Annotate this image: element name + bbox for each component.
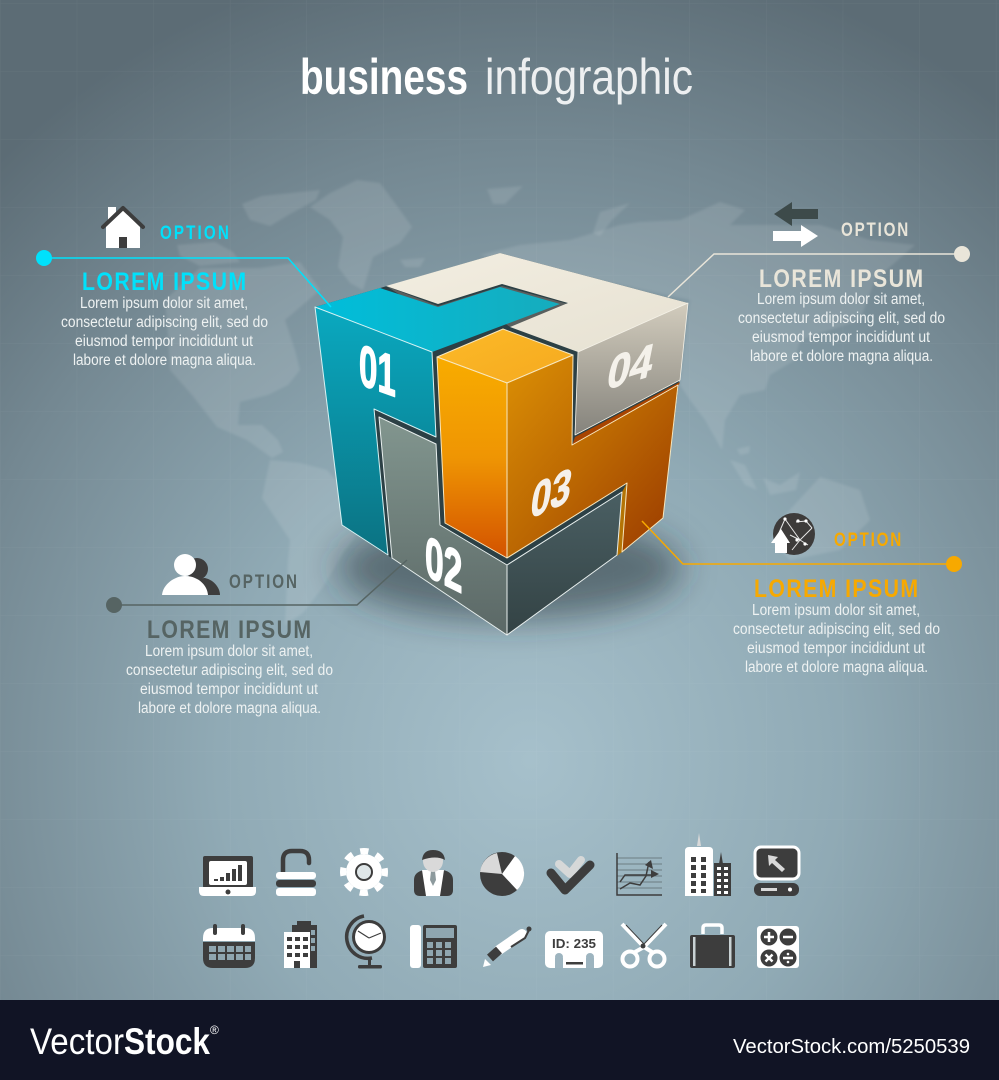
text block: Lorem ipsum dolor sit amet, [80, 295, 248, 312]
cube piece 03 [437, 329, 678, 558]
icon: exchange arrows [773, 202, 818, 247]
text block: labore et dolore magna aliqua. [138, 700, 321, 717]
text block [126, 643, 333, 717]
text block: eiusmod tempor incididunt ut [75, 333, 254, 350]
icon: office building [284, 921, 317, 968]
text block [61, 295, 268, 369]
text block: labore et dolore magna aliqua. [73, 352, 256, 369]
leader line: option 2 [106, 560, 407, 613]
watermark id: VectorStock.com/5250539 [733, 1036, 970, 1058]
icon row 2 [203, 916, 799, 968]
text block: consectetur adipiscing elit, sed do [126, 662, 333, 679]
icon: calendar [203, 924, 255, 968]
icon: briefcase [690, 925, 735, 968]
panel: option 4 [738, 202, 945, 365]
cube piece 01: 01 [359, 333, 396, 410]
cube piece 03: 03 [527, 456, 575, 530]
icon: pie chart [480, 852, 524, 896]
icon: open lock [276, 851, 316, 896]
icon: businessman [414, 850, 453, 896]
cube piece 02: 02 [425, 524, 462, 607]
heading: LOREM IPSUM [759, 264, 923, 292]
label: OPTION [160, 221, 229, 243]
cube shadow [338, 516, 682, 620]
icon: globe clock [347, 916, 384, 968]
world map [165, 180, 915, 625]
text block: eiusmod tempor incididunt ut [747, 640, 926, 657]
watermark logo: ® [210, 1023, 219, 1037]
3D puzzle cube [315, 253, 688, 635]
label: OPTION [834, 528, 901, 550]
title: infographic [485, 49, 693, 105]
panel: option 2 [126, 554, 333, 717]
text block: consectetur adipiscing elit, sed do [61, 314, 268, 331]
icon: laptop chart [199, 856, 256, 896]
text block: Lorem ipsum dolor sit amet, [752, 602, 920, 619]
text block: eiusmod tempor incididunt ut [140, 681, 319, 698]
icon: id badge [545, 931, 603, 968]
title: business [300, 49, 468, 105]
text block [738, 291, 945, 365]
cube piece 04 [386, 253, 688, 435]
cube piece 04: 04 [603, 333, 659, 401]
text block: consectetur adipiscing elit, sed do [733, 621, 940, 638]
icon: line chart [617, 853, 662, 895]
text block: labore et dolore magna aliqua. [750, 348, 933, 365]
heading: LOREM IPSUM [82, 267, 246, 295]
heading: LOREM IPSUM [147, 615, 311, 643]
icon row 1 [199, 833, 799, 896]
icon: scissors [622, 924, 666, 966]
icon: computer cursor [754, 847, 799, 896]
text block: eiusmod tempor incididunt ut [752, 329, 931, 346]
leader line: option 3 [642, 521, 962, 572]
icon: math symbols [757, 926, 799, 968]
cube piece 01 [315, 287, 560, 555]
text block [733, 602, 940, 676]
label: OPTION [229, 570, 297, 592]
text block: labore et dolore magna aliqua. [745, 659, 928, 676]
panel: option 1 [61, 207, 268, 369]
text block: Lorem ipsum dolor sit amet, [757, 291, 925, 308]
icon: city buildings [685, 833, 731, 896]
icon: id badge: ID: 235 [552, 936, 596, 951]
heading: LOREM IPSUM [754, 574, 918, 602]
label: OPTION [841, 218, 908, 240]
title [300, 49, 693, 105]
icon: check mark [551, 860, 590, 890]
icon: pen [483, 926, 532, 967]
leader line: option 4 [668, 246, 970, 297]
watermark logo: VectorStock [30, 1021, 225, 1062]
icon: users [162, 554, 220, 595]
icon: calculator phone [410, 925, 457, 968]
cube piece 02 [379, 417, 622, 635]
text block: Lorem ipsum dolor sit amet, [145, 643, 313, 660]
leader line: option 1 [36, 250, 331, 307]
text block: consectetur adipiscing elit, sed do [738, 310, 945, 327]
icon: network globe [771, 513, 815, 555]
footer bar [0, 1000, 999, 1080]
icon: house [103, 207, 143, 248]
icon: gear [343, 851, 385, 893]
panel: option 3 [733, 513, 940, 676]
